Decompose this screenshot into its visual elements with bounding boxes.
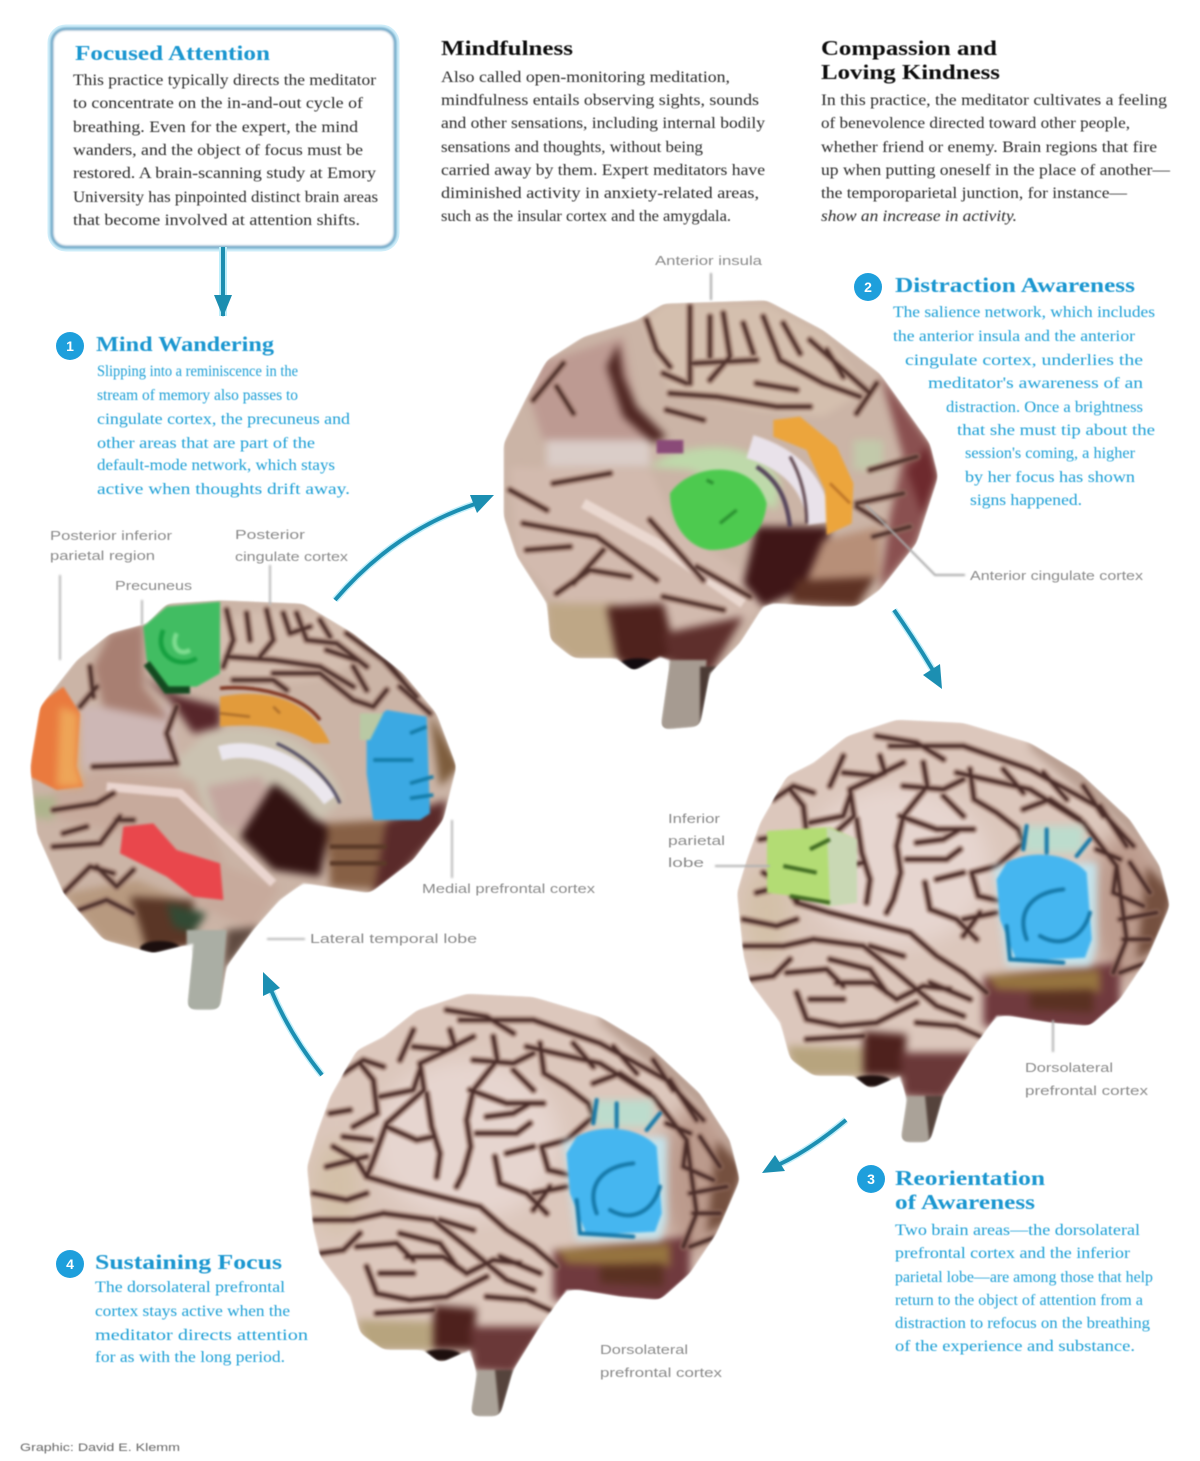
label: posterior cingulate cortex: Posterior xyxy=(235,527,306,542)
labels: top brain leader lines xyxy=(711,273,965,575)
text: mind wandering description: other areas that are part of the xyxy=(97,435,315,452)
step 1: mind wandering xyxy=(56,332,350,498)
icon: number 1 xyxy=(56,332,84,360)
text: mindfulness description: such as the insular cortex and the amygdala. xyxy=(441,208,731,225)
brain: medial view with default-mode network (left) xyxy=(30,600,456,1011)
text: mind wandering description: stream of memory also passes to xyxy=(97,387,298,404)
text: focused attention description: breathing. Even for the expert, the mind xyxy=(73,119,358,136)
label: dorsolateral prefrontal cortex (right brain) xyxy=(1025,1060,1149,1098)
text: focused attention description: wanders, and the object of focus must be xyxy=(73,142,363,159)
arrow: left brain to top brain xyxy=(335,495,494,600)
text: distraction awareness description: that she must tip about the xyxy=(957,422,1155,439)
label: dorsolateral prefrontal cortex (bottom brain): Dorsolateral xyxy=(600,1342,688,1357)
text: sustaining focus description: for as with the long period. xyxy=(95,1349,285,1366)
icon: number 4 xyxy=(56,1250,84,1278)
text: mindfulness description: mindfulness entails observing sights, sounds xyxy=(441,92,759,109)
heading: reorientation of awareness xyxy=(895,1166,1045,1214)
arrow: from box to mind wandering xyxy=(214,247,232,317)
label: lateral temporal lobe: Lateral temporal lobe xyxy=(310,931,477,946)
text: mindfulness description: Also called open-monitoring meditation, xyxy=(441,69,730,86)
icon: number 3: 3 xyxy=(867,1171,875,1187)
text: focused attention description: to concentrate on the in-and-out cycle of xyxy=(73,95,364,112)
label: inferior parietal lobe xyxy=(668,811,725,870)
step 2: distraction awareness xyxy=(854,273,1155,509)
heading: focused attention: Focused Attention xyxy=(75,41,270,65)
text: focused attention description: This practice typically directs the meditator xyxy=(73,72,377,89)
panel: focused attention box xyxy=(52,29,395,247)
brain: lateral view with dorsolateral prefrontal cortex (bottom) xyxy=(300,980,767,1430)
text: distraction awareness description: by her focus has shown xyxy=(965,469,1135,486)
labels: right brain leader lines xyxy=(715,866,1053,1052)
heading: reorientation of awareness: Reorientation xyxy=(895,1166,1045,1190)
text: compassion description: of benevolence directed toward other people, xyxy=(821,115,1130,132)
label: posterior cingulate cortex xyxy=(235,527,349,564)
label: posterior inferior parietal region: Posterior inferior xyxy=(50,528,173,543)
arrow: bottom brain to left brain xyxy=(263,972,322,1075)
step 4: sustaining focus xyxy=(56,1250,308,1366)
heading: compassion and loving kindness xyxy=(821,36,1000,84)
text: distraction awareness description: signs happened. xyxy=(970,492,1082,509)
text: mind wandering description: active when thoughts drift away. xyxy=(97,481,350,498)
icon: number 1: 1 xyxy=(66,338,74,354)
label: dorsolateral prefrontal cortex (right brain): Dorsolateral xyxy=(1025,1060,1113,1075)
icon: number 2: 2 xyxy=(864,279,872,295)
region: inferior parietal lobe xyxy=(767,827,857,906)
text: mindfulness description: and other sensations, including internal bodily xyxy=(441,115,765,132)
text: mindfulness description: sensations and thoughts, without being xyxy=(441,139,703,156)
label: dorsolateral prefrontal cortex (right brain): prefrontal cortex xyxy=(1025,1083,1149,1098)
credit: Graphic: David E. Klemm xyxy=(20,1442,180,1454)
arrow: right brain to bottom brain xyxy=(762,1120,846,1173)
text: reorientation description: return to the object of attention from a xyxy=(895,1292,1143,1309)
label: medial prefrontal cortex: Medial prefrontal cortex xyxy=(422,881,596,896)
text: distraction awareness description: the anterior insula and the anterior xyxy=(893,328,1136,345)
text: distraction awareness description: The salience network, which includes xyxy=(893,304,1155,321)
text: reorientation description: distraction to refocus on the breathing xyxy=(895,1315,1150,1332)
text: focused attention description: restored. A brain-scanning study at Emory xyxy=(73,165,376,182)
text: mindfulness description: diminished activity in anxiety-related areas, xyxy=(441,185,759,202)
heading: sustaining focus: Sustaining Focus xyxy=(95,1250,282,1274)
step 3: reorientation of awareness xyxy=(857,1165,1153,1355)
label: inferior parietal lobe: parietal xyxy=(668,833,725,848)
label: precuneus: Precuneus xyxy=(115,578,193,593)
text: focused attention description: University has pinpointed distinct brain areas xyxy=(73,189,378,206)
brain: lateral view with inferior parietal lobe (right) xyxy=(730,706,1197,1156)
text: reorientation description: Two brain areas—the dorsolateral xyxy=(895,1222,1141,1239)
heading: mind wandering: Mind Wandering xyxy=(96,332,275,356)
label: posterior inferior parietal region xyxy=(50,528,173,563)
label: posterior inferior parietal region: parietal region xyxy=(50,548,155,563)
text: distraction awareness description: session's coming, a higher xyxy=(965,445,1136,462)
text: sustaining focus description: cortex stays active when the xyxy=(95,1303,290,1320)
label: dorsolateral prefrontal cortex (bottom brain) xyxy=(600,1342,723,1380)
text: mindfulness description xyxy=(441,69,765,225)
text: distraction awareness description: cingulate cortex, underlies the xyxy=(905,352,1143,369)
arrow: top brain to right brain xyxy=(894,610,942,689)
text: mind wandering description: cingulate cortex, the precuneus and xyxy=(97,411,350,428)
icon: number 4: 4 xyxy=(66,1256,74,1272)
label: inferior parietal lobe: lobe xyxy=(668,855,704,870)
text: distraction awareness description: meditator's awareness of an xyxy=(928,375,1143,392)
heading: mindfulness: Mindfulness xyxy=(441,36,573,60)
icon: number 3 xyxy=(857,1165,885,1193)
text: sustaining focus description: The dorsolateral prefrontal xyxy=(95,1279,286,1296)
text: compassion description: show an increase in activity. xyxy=(821,208,1017,225)
text: sustaining focus description: meditator directs attention xyxy=(95,1327,308,1344)
text: reorientation description: prefrontal cortex and the inferior xyxy=(895,1245,1131,1262)
heading: distraction awareness: Distraction Awareness xyxy=(895,273,1135,297)
label: anterior insula: Anterior insula xyxy=(655,253,763,268)
label: inferior parietal lobe: Inferior xyxy=(668,811,721,826)
text: focused attention description: that become involved at attention shifts. xyxy=(73,212,360,229)
text: distraction awareness description: distraction. Once a brightness xyxy=(946,399,1143,416)
text: mindfulness description: carried away by them. Expert meditators have xyxy=(441,162,765,179)
text: compassion description: the temporoparietal junction, for instance— xyxy=(821,185,1128,202)
text: mind wandering description xyxy=(97,363,350,498)
text: compassion description: up when putting oneself in the place of another— xyxy=(821,162,1171,179)
label leader: bottom brain xyxy=(621,1297,623,1330)
text: mind wandering description: Slipping into a reminiscence in the xyxy=(97,363,298,380)
text: mind wandering description: default-mode network, which stays xyxy=(97,457,335,474)
text: distraction awareness description xyxy=(893,304,1155,509)
text: sustaining focus description xyxy=(95,1279,308,1366)
heading: reorientation of awareness: of Awareness xyxy=(895,1190,1035,1214)
text: compassion description: whether friend or enemy. Brain regions that fire xyxy=(821,139,1157,156)
text: reorientation description: of the experience and substance. xyxy=(895,1338,1135,1355)
icon: number 2 xyxy=(854,273,882,301)
label: dorsolateral prefrontal cortex (bottom brain): prefrontal cortex xyxy=(600,1365,723,1380)
labels: left brain leader lines xyxy=(60,565,452,939)
text: compassion description: In this practice, the meditator cultivates a feeling xyxy=(821,92,1167,109)
text: compassion description xyxy=(821,92,1171,225)
label: anterior cingulate cortex: Anterior cingulate cortex xyxy=(970,568,1144,583)
text: focused attention description xyxy=(73,72,378,229)
brain: medial view with salience network (top) xyxy=(490,297,957,737)
text: reorientation description: parietal lobe—are among those that help xyxy=(895,1269,1153,1286)
heading: compassion and loving kindness: Loving Kindness xyxy=(821,60,1000,84)
label: posterior cingulate cortex: cingulate cortex xyxy=(235,549,349,564)
heading: compassion and loving kindness: Compassion and xyxy=(821,36,997,60)
text: reorientation description xyxy=(895,1222,1153,1355)
